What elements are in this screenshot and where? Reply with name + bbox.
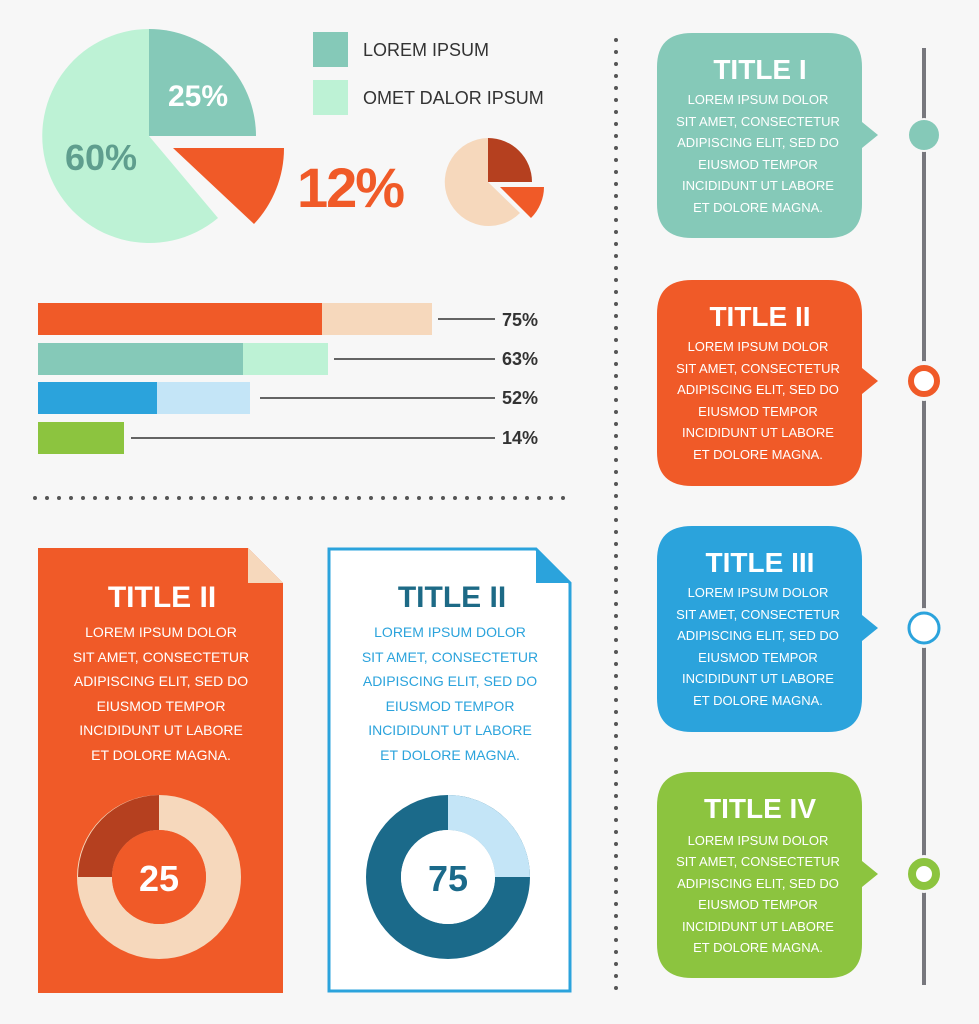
timeline item 3: ET DOLORE MAGNA. [693, 693, 823, 708]
timeline item 1: INCIDIDUNT UT LABORE [682, 178, 834, 193]
timeline item 2: EIUSMOD TEMPOR [698, 404, 818, 419]
timeline item 3: EIUSMOD TEMPOR [698, 650, 818, 665]
big percentage label: 12% [297, 156, 404, 219]
legend [313, 32, 544, 115]
timeline item 1: ET DOLORE MAGNA. [693, 200, 823, 215]
timeline item 1: ADIPISCING ELIT, SED DO [677, 135, 839, 150]
card: blue outline: LOREM IPSUM DOLOR [374, 624, 526, 640]
bar chart: 75% [502, 310, 538, 330]
timeline item 4: EIUSMOD TEMPOR [698, 897, 818, 912]
card: orange: TITLE II [108, 581, 216, 614]
timeline item 3: LOREM IPSUM DOLOR [688, 585, 828, 600]
timeline item 1 [657, 33, 941, 238]
timeline item 2: TITLE II [709, 301, 811, 332]
timeline item 4: TITLE IV [704, 793, 816, 824]
timeline item 4: SIT AMET, CONSECTETUR [676, 854, 840, 869]
big pie chart [42, 29, 284, 243]
bar chart [38, 303, 538, 454]
card: blue outline: ET DOLORE MAGNA. [380, 747, 520, 763]
timeline item 2: SIT AMET, CONSECTETUR [676, 361, 840, 376]
timeline item 2: ET DOLORE MAGNA. [693, 447, 823, 462]
timeline item 1: LOREM IPSUM DOLOR [688, 92, 828, 107]
big pie chart: 60% [65, 137, 137, 178]
timeline item 1: EIUSMOD TEMPOR [698, 157, 818, 172]
big pie chart: 25% [168, 80, 228, 113]
bar chart: 14% [502, 428, 538, 448]
card: blue outline: EIUSMOD TEMPOR [386, 698, 514, 714]
timeline item 4: LOREM IPSUM DOLOR [688, 833, 828, 848]
timeline line [922, 48, 926, 985]
card: blue outline: SIT AMET, CONSECTETUR [362, 649, 538, 665]
timeline item 1: TITLE I [713, 54, 807, 85]
timeline item 3: ADIPISCING ELIT, SED DO [677, 628, 839, 643]
timeline item 2: INCIDIDUNT UT LABORE [682, 425, 834, 440]
timeline item 2: LOREM IPSUM DOLOR [688, 339, 828, 354]
card: blue outline: 75 [428, 858, 468, 899]
card: orange: 25 [139, 858, 179, 899]
card: blue outline [329, 549, 570, 991]
card: orange: INCIDIDUNT UT LABORE [79, 722, 243, 738]
timeline item 4: ADIPISCING ELIT, SED DO [677, 876, 839, 891]
card: orange: EIUSMOD TEMPOR [97, 698, 225, 714]
timeline item 3: INCIDIDUNT UT LABORE [682, 671, 834, 686]
timeline item 2 [657, 280, 944, 486]
timeline item 4: INCIDIDUNT UT LABORE [682, 919, 834, 934]
timeline item 1: SIT AMET, CONSECTETUR [676, 114, 840, 129]
card: blue outline: ADIPISCING ELIT, SED DO [363, 673, 537, 689]
card: blue outline: INCIDIDUNT UT LABORE [368, 722, 532, 738]
card: orange: LOREM IPSUM DOLOR [85, 624, 237, 640]
timeline item 2: ADIPISCING ELIT, SED DO [677, 382, 839, 397]
legend: OMET DALOR IPSUM [363, 88, 544, 108]
card: orange: SIT AMET, CONSECTETUR [73, 649, 249, 665]
timeline item 3: TITLE III [706, 547, 814, 578]
timeline item 4 [657, 772, 943, 978]
timeline item 3 [657, 526, 944, 732]
timeline item 4: ET DOLORE MAGNA. [693, 940, 823, 955]
card: orange: ET DOLORE MAGNA. [91, 747, 231, 763]
legend: LOREM IPSUM [363, 40, 489, 60]
bar chart: 52% [502, 388, 538, 408]
small pie chart [445, 138, 544, 226]
card: orange [38, 548, 283, 993]
card: blue outline: TITLE II [398, 581, 506, 614]
timeline item 3: SIT AMET, CONSECTETUR [676, 607, 840, 622]
bar chart: 63% [502, 349, 538, 369]
card: orange: ADIPISCING ELIT, SED DO [74, 673, 248, 689]
